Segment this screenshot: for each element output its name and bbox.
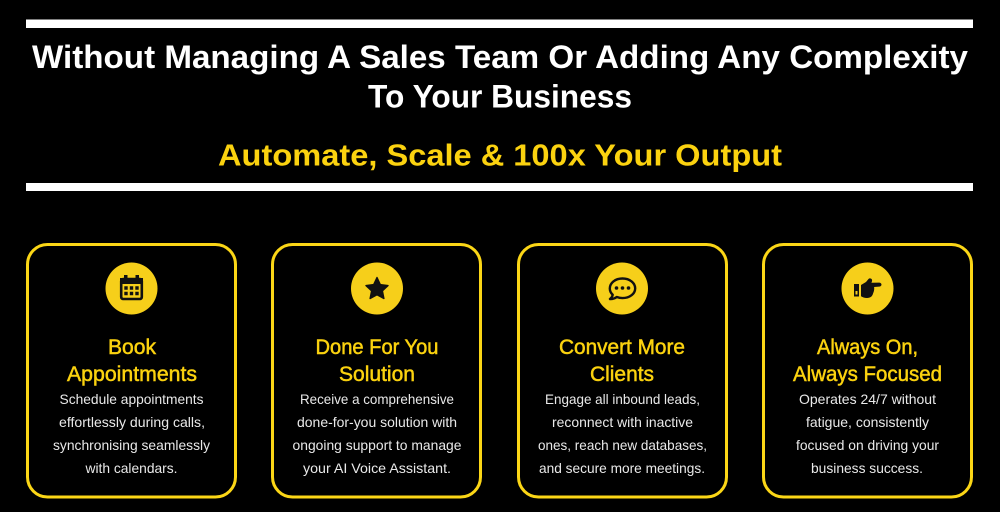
title xyxy=(32,39,968,114)
card description: Receive a comprehensive xyxy=(300,391,454,407)
card description: Schedule appointments xyxy=(60,391,204,407)
icon: pointing hand xyxy=(842,262,894,314)
title: Without Managing A Sales Team Or Adding Any Complexity xyxy=(32,39,968,75)
card heading xyxy=(67,335,197,386)
card description: business success. xyxy=(811,460,923,476)
card description xyxy=(796,391,939,476)
card description: synchronising seamlessly xyxy=(53,437,210,453)
icon: star xyxy=(351,262,403,314)
panel: done for you solution xyxy=(272,244,480,497)
card heading: Done For You xyxy=(316,335,438,359)
bottom white bar xyxy=(26,183,973,191)
card description: ones, reach new databases, xyxy=(538,437,707,453)
card heading xyxy=(316,335,438,386)
card description: with calendars. xyxy=(85,460,178,476)
panel: always on, always focused xyxy=(764,244,972,497)
card description xyxy=(53,391,210,476)
card outline xyxy=(28,244,236,497)
card description: Engage all inbound leads, xyxy=(545,391,700,407)
card heading: Always Focused xyxy=(793,362,942,386)
card description: fatigue, consistently xyxy=(806,414,929,430)
card description: ongoing support to manage xyxy=(292,437,462,453)
panel: book appointments xyxy=(28,244,236,497)
card heading: Book xyxy=(108,335,156,359)
card description xyxy=(292,391,462,476)
card heading: Appointments xyxy=(67,362,197,386)
card description: focused on driving your xyxy=(796,437,939,453)
top white bar xyxy=(26,20,973,28)
icon: chat bubble xyxy=(596,262,648,314)
card description: effortlessly during calls, xyxy=(59,414,205,430)
card heading xyxy=(793,335,942,386)
subtitle: Automate, Scale & 100x Your Output xyxy=(218,138,782,172)
card outline xyxy=(272,244,480,497)
card description: and secure more meetings. xyxy=(539,460,705,476)
card heading: Clients xyxy=(590,362,654,386)
card description: done-for-you solution with xyxy=(297,414,457,430)
card outline xyxy=(518,244,726,497)
panel: convert more clients xyxy=(518,244,726,497)
card heading: Solution xyxy=(339,362,415,386)
card outline xyxy=(764,244,972,497)
card description: your AI Voice Assistant. xyxy=(303,460,451,476)
card heading: Always On, xyxy=(817,335,918,359)
card heading: Convert More xyxy=(559,335,685,359)
card heading xyxy=(559,335,685,386)
card description: reconnect with inactive xyxy=(552,414,693,430)
card description: Operates 24/7 without xyxy=(799,391,936,407)
title: To Your Business xyxy=(368,78,632,114)
icon: calendar xyxy=(106,262,158,314)
card description xyxy=(538,391,707,476)
